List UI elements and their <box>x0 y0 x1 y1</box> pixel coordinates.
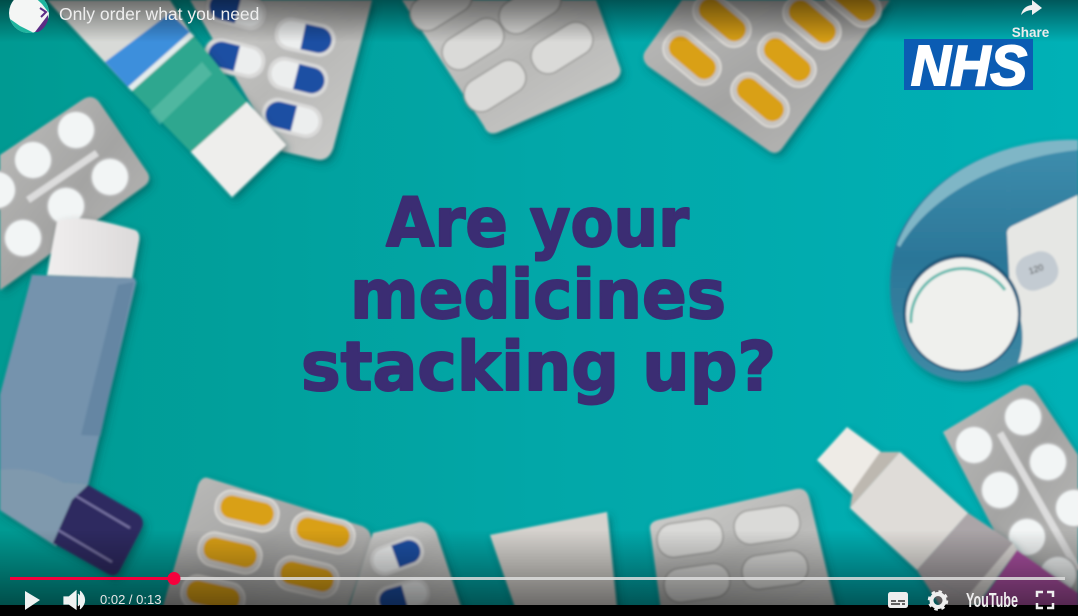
tube: blue and green top <box>47 0 286 197</box>
metered dose inhaler left <box>0 218 143 575</box>
channel avatar <box>9 0 49 33</box>
NHS logo: NHS <box>911 34 1027 98</box>
progress handle <box>168 572 180 585</box>
headline: stacking up? <box>301 328 776 407</box>
mouthpiece <box>0 469 88 546</box>
share icon <box>1021 0 1042 15</box>
inhaler body <box>0 275 136 484</box>
play icon <box>25 591 40 610</box>
purple cap <box>53 485 143 575</box>
dial inhaler right <box>890 140 1078 381</box>
blister: round tablets left <box>0 97 149 290</box>
headline: medicines <box>350 256 726 335</box>
fullscreen icon <box>1037 592 1053 608</box>
top shade <box>0 0 1078 42</box>
time readout: 0:02 / 0:13 <box>100 592 161 607</box>
canister <box>47 218 139 278</box>
blister: yellow pills top <box>643 0 890 153</box>
blister: blue capsules bottom <box>348 522 462 616</box>
blister: white pills bottom <box>650 489 836 610</box>
video title: Only order what you need <box>59 4 259 24</box>
volume icon <box>64 591 84 609</box>
captions icon <box>888 592 908 608</box>
progress played <box>10 577 174 580</box>
headline <box>301 184 776 407</box>
settings gear icon <box>929 592 947 610</box>
progress track <box>10 577 1065 580</box>
YouTube wordmark: YouTube <box>966 590 1018 612</box>
dose counter: 120 <box>1027 262 1045 276</box>
blister: round tablets right <box>943 385 1078 600</box>
bottom shade <box>0 530 1078 606</box>
headline: Are your <box>386 184 689 263</box>
blister: yellow pills bottom <box>162 478 371 616</box>
blister: white pills top <box>402 0 620 133</box>
share label: Share <box>1012 25 1050 40</box>
tube: plain white bottom <box>490 512 617 610</box>
tube: purple bottom right <box>817 427 1078 610</box>
player bar <box>0 605 1078 616</box>
blister: blue capsules top <box>190 0 372 160</box>
